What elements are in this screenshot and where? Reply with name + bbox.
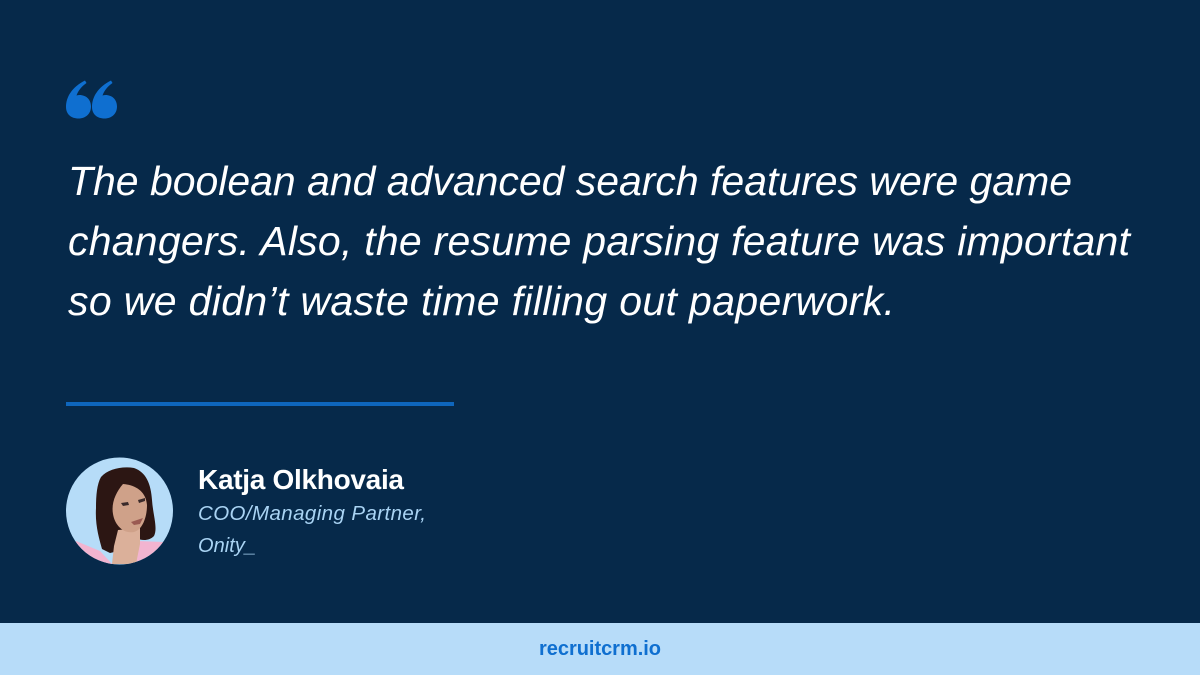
quote text: so we didn’t waste time filling out paperwork. bbox=[68, 278, 895, 324]
icon: quotation marks bbox=[66, 80, 117, 118]
quote text: The boolean and advanced search features were game bbox=[68, 158, 1072, 204]
job title: COO/Managing Partner, bbox=[198, 502, 426, 525]
quote text bbox=[68, 158, 1132, 324]
company: Onity_ bbox=[198, 535, 256, 557]
footer band bbox=[0, 623, 1200, 675]
portrait avatar bbox=[66, 457, 174, 566]
quote text: changers. Also, the resume parsing feature was important bbox=[68, 218, 1132, 264]
divider line bbox=[66, 402, 454, 406]
name: Katja Olkhovaia bbox=[198, 464, 404, 495]
footer band: recruitcrm.io bbox=[539, 638, 661, 660]
